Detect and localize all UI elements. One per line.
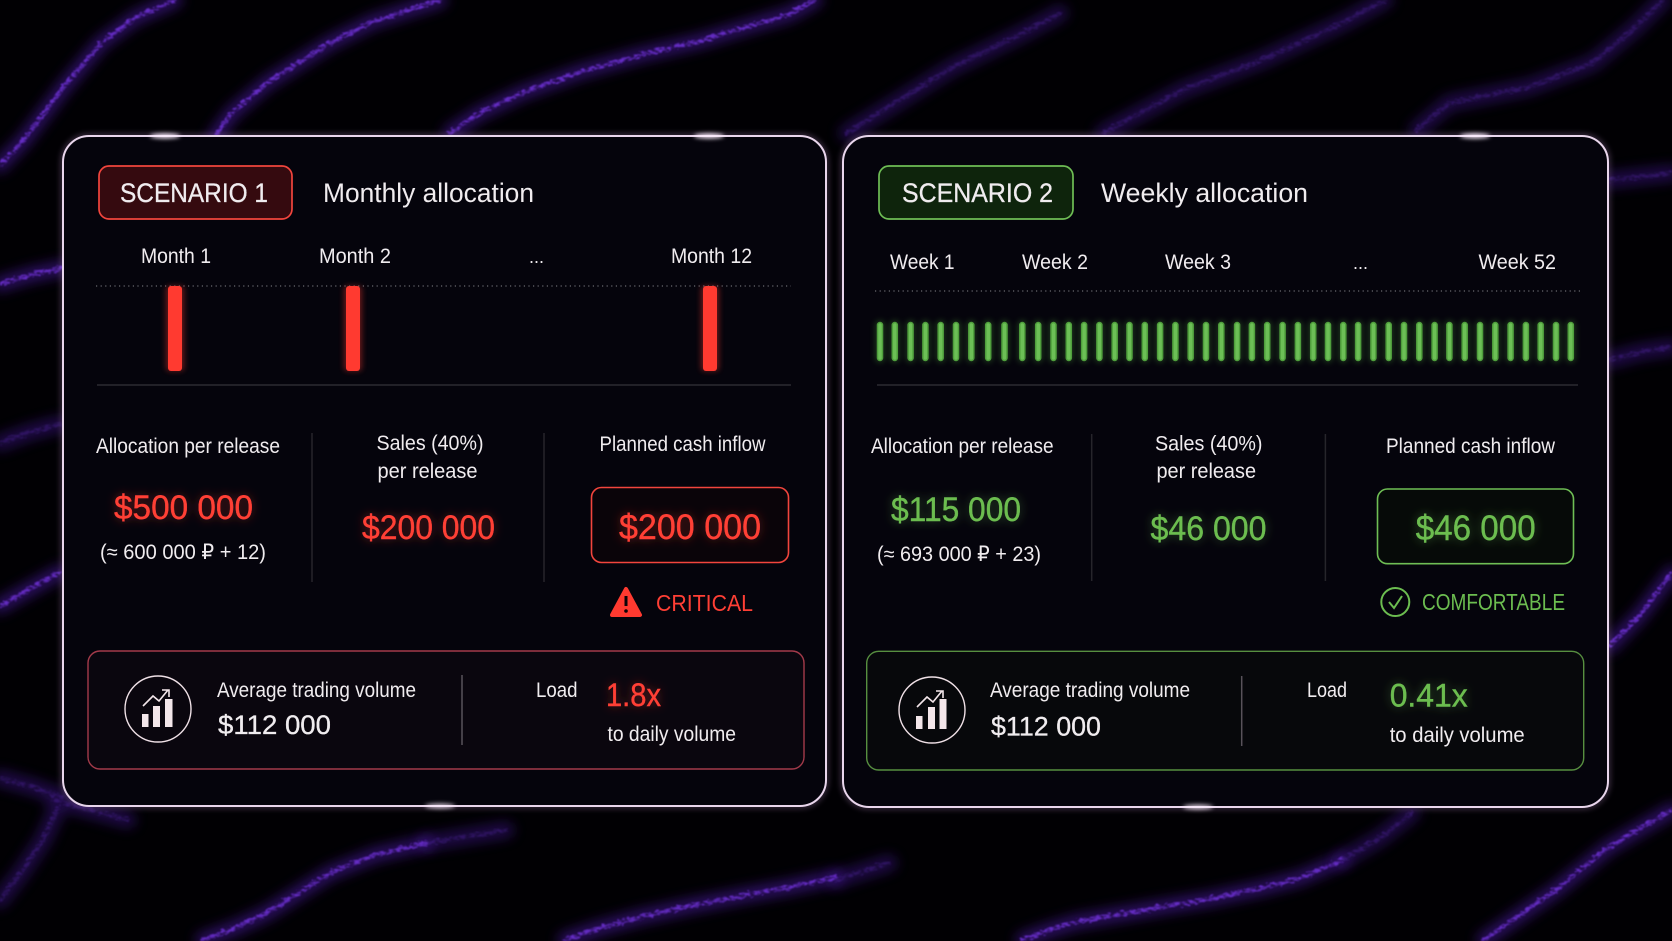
callout: trading volume and load xyxy=(88,651,804,769)
panel 2 frame xyxy=(843,134,1608,810)
stat: planned cash inflow xyxy=(592,433,788,562)
stat: allocation per release: (≈ 693 000 ₽ + 23) xyxy=(877,543,1041,566)
timeline labels: months: ... xyxy=(529,247,544,267)
stat: allocation per release: $115 000 xyxy=(891,491,1021,529)
stat: planned cash inflow: $46 000 xyxy=(1416,509,1536,548)
stat: sales per release: per release xyxy=(1156,460,1256,483)
timeline labels: months: Month 12 xyxy=(671,245,752,268)
badge: scenario 1: SCENARIO 1 xyxy=(120,178,268,208)
stat: planned cash inflow: $200 000 xyxy=(619,508,761,547)
text: average trading volume: Average trading volume xyxy=(217,679,416,702)
heading: weekly allocation: Weekly allocation xyxy=(1101,178,1308,208)
timeline labels: weeks xyxy=(890,251,1556,274)
stat: sales per release: Sales (40%) xyxy=(376,432,484,455)
text: load ratio: to daily volume xyxy=(1390,724,1525,747)
icon: chart in circle xyxy=(899,677,965,743)
badge: scenario 2 xyxy=(879,166,1073,219)
panel: scenario 1 monthly allocation xyxy=(63,134,826,808)
badge: scenario 1 xyxy=(99,166,292,219)
stat: allocation per release: (≈ 600 000 ₽ + 12) xyxy=(100,541,266,564)
callout: trading volume and load xyxy=(867,651,1584,770)
stat: planned cash inflow xyxy=(1378,435,1574,564)
text: load ratio: Load xyxy=(536,679,578,702)
stat: sales per release: per release xyxy=(378,460,478,483)
stat: allocation per release: $500 000 xyxy=(114,489,253,527)
text: load ratio: to daily volume xyxy=(608,723,736,746)
timeline labels: weeks: Week 52 xyxy=(1478,251,1556,274)
text: load ratio: 1.8x xyxy=(606,677,661,713)
stat: allocation per release xyxy=(871,435,1054,566)
icon: check circle xyxy=(1381,588,1409,616)
stat: allocation per release xyxy=(96,435,280,564)
chart: monthly release bars xyxy=(166,286,719,371)
text: load ratio: Load xyxy=(1307,679,1347,702)
status: critical xyxy=(612,589,753,616)
timeline labels: weeks: ... xyxy=(1353,253,1368,273)
timeline labels: months xyxy=(141,245,752,268)
text: load ratio: 0.41x xyxy=(1390,678,1468,714)
text: load ratio xyxy=(536,677,736,746)
timeline labels: months: Month 2 xyxy=(319,245,391,268)
stat: sales per release xyxy=(362,432,495,547)
stat: allocation per release: Allocation per release xyxy=(871,435,1054,458)
text: load ratio xyxy=(1307,678,1525,747)
stat: sales per release: Sales (40%) xyxy=(1155,432,1262,456)
text: average trading volume: Average trading volume xyxy=(990,679,1190,702)
panel 1 frame xyxy=(63,134,826,808)
status: comfortable: COMFORTABLE xyxy=(1422,589,1565,615)
timeline labels: weeks: Week 1 xyxy=(890,251,954,274)
heading: monthly allocation: Monthly allocation xyxy=(323,178,534,208)
timeline labels: weeks: Week 2 xyxy=(1022,251,1088,274)
badge: scenario 2: SCENARIO 2 xyxy=(902,178,1053,208)
icon: warning triangle xyxy=(612,589,640,615)
stat: planned cash inflow: Planned cash inflow xyxy=(1386,435,1556,458)
text: average trading volume: $112 000 xyxy=(218,710,331,740)
stat: planned cash inflow: Planned cash inflow xyxy=(600,433,766,456)
chart: weekly release bars xyxy=(880,325,1571,358)
text: average trading volume: $112 000 xyxy=(991,712,1101,742)
timeline labels: months: Month 1 xyxy=(141,245,211,268)
stat: allocation per release: Allocation per release xyxy=(96,435,280,458)
text: average trading volume xyxy=(990,679,1190,742)
status: comfortable xyxy=(1381,588,1565,616)
stat: sales per release xyxy=(1150,432,1266,548)
timeline labels: weeks: Week 3 xyxy=(1165,251,1231,274)
stat: sales per release: $46 000 xyxy=(1150,510,1266,548)
stat: sales per release: $200 000 xyxy=(362,509,495,547)
text: average trading volume xyxy=(217,679,416,740)
status: critical: CRITICAL xyxy=(656,590,753,616)
panel: scenario 2 weekly allocation xyxy=(843,134,1608,810)
icon: chart in circle xyxy=(125,676,191,742)
